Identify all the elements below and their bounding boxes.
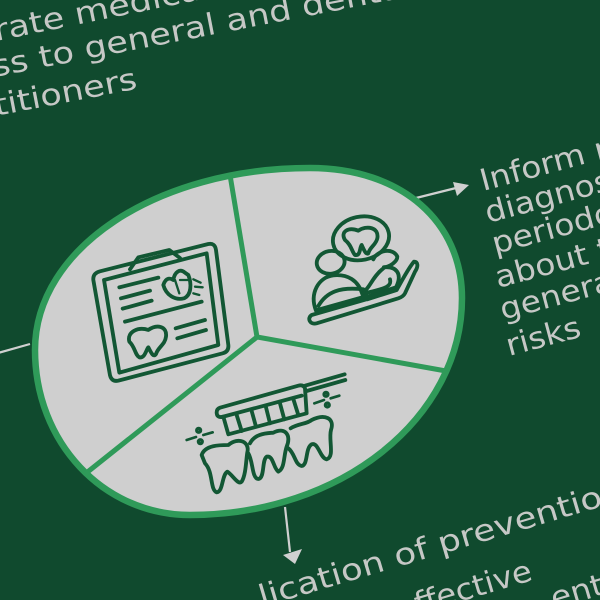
arrow: right bbox=[412, 182, 469, 199]
text block: right bbox=[476, 100, 600, 363]
icon: medical clipboard bbox=[93, 244, 228, 381]
arrow: left bbox=[0, 344, 30, 353]
text block: top bbox=[0, 0, 414, 123]
segment dividers bbox=[85, 175, 446, 474]
arrow: bottom bbox=[283, 507, 302, 564]
disc bbox=[35, 168, 462, 515]
icon: toothbrush and teeth bbox=[187, 374, 345, 492]
circular diagram bbox=[35, 168, 462, 515]
icon: dental patient bbox=[309, 211, 417, 324]
text block: right: risks bbox=[502, 311, 585, 363]
